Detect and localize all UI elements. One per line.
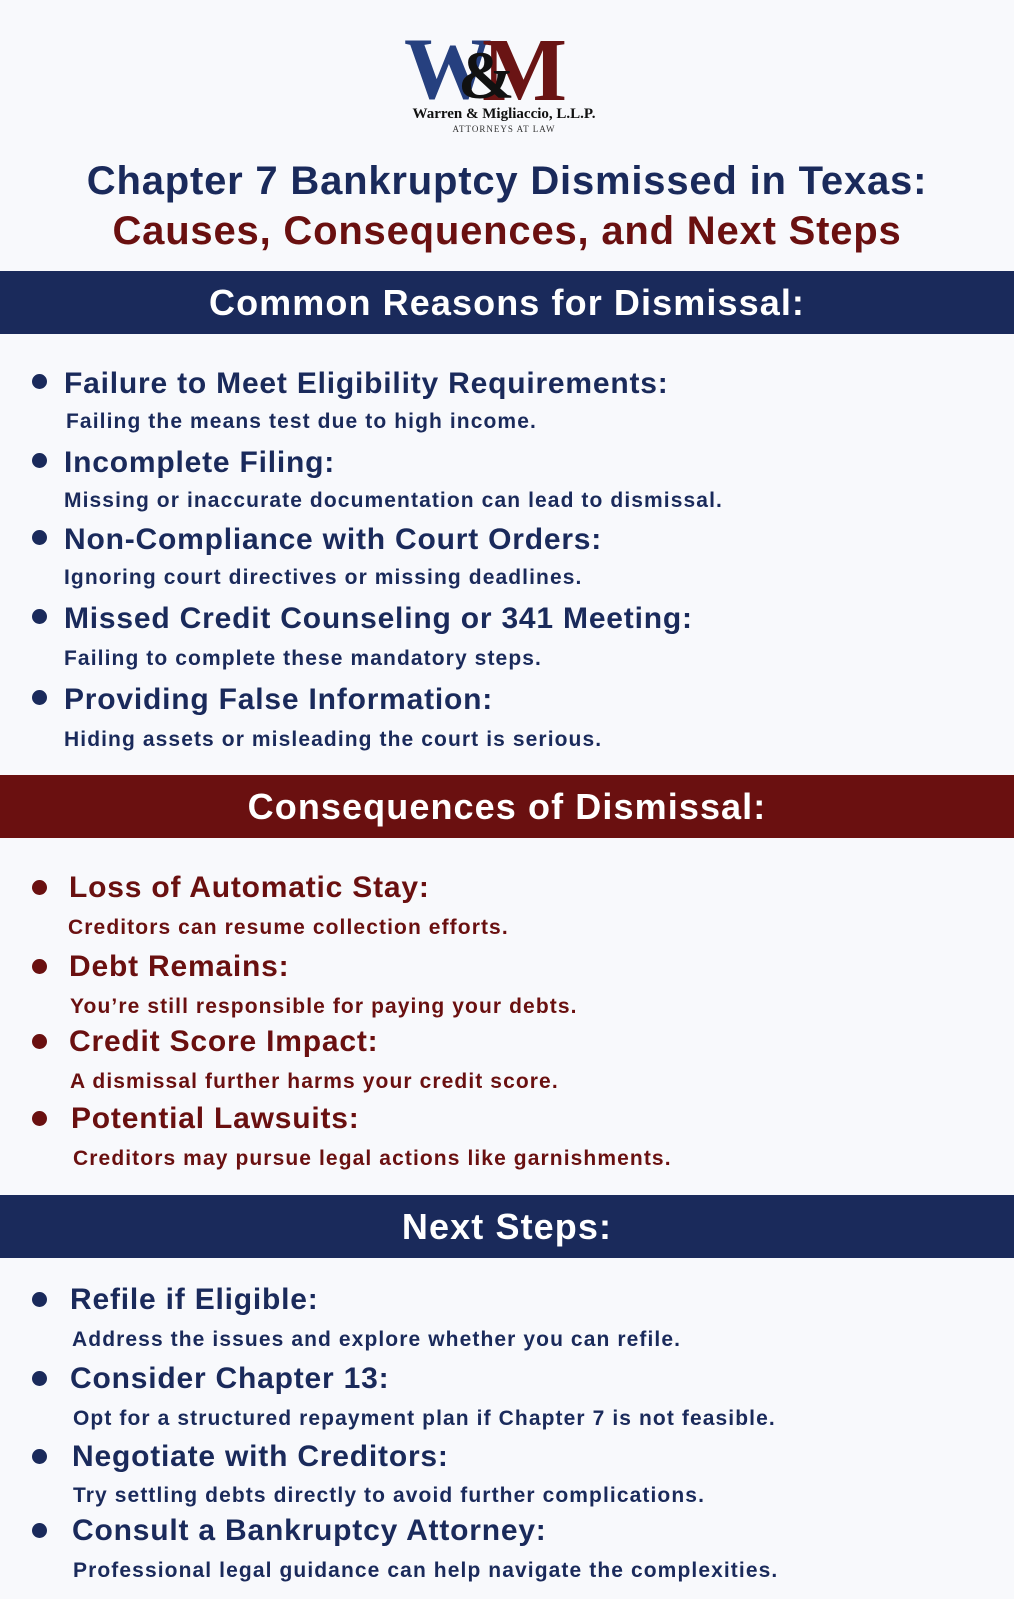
list: consequences: A dismissal further harms your credit score. [70, 1070, 559, 1093]
list: reasons: Failing to complete these mandatory steps. [64, 647, 542, 670]
list: reasons: Failing the means test due to high income. [66, 410, 537, 433]
list: consequences: Creditors can resume collection efforts. [68, 916, 509, 939]
section bar: reasons: Common Reasons for Dismissal: [209, 282, 805, 323]
list: next steps: Refile if Eligible: [70, 1283, 319, 1316]
list: reasons: Failure to Meet Eligibility Requirements: [64, 367, 669, 400]
list: next steps: Negotiate with Creditors: [72, 1440, 449, 1473]
list: consequences: Debt Remains: [69, 950, 289, 983]
logo: Warren & Migliaccio, L.L.P. [413, 106, 596, 122]
title: Chapter 7 Bankruptcy Dismissed in Texas: [87, 159, 927, 203]
list: reasons: Non-Compliance with Court Orders: [64, 523, 602, 556]
list: reasons: Hiding assets or misleading the court is serious. [64, 728, 602, 751]
list: reasons: Missed Credit Counseling or 341 Meeting: [64, 602, 693, 635]
section bar: consequences: Consequences of Dismissal: [248, 786, 766, 827]
list: reasons: Missing or inaccurate documentation can lead to dismissal. [64, 489, 723, 512]
list: consequences: Credit Score Impact: [69, 1025, 378, 1058]
logo [404, 21, 596, 134]
section bar: reasons [0, 271, 1014, 334]
section bar: next steps: Next Steps: [402, 1206, 612, 1247]
logo: & [458, 37, 515, 113]
list: next steps: Try settling debts directly to avoid further complications. [73, 1484, 705, 1507]
list: consequences: You’re still responsible for paying your debts. [70, 995, 578, 1018]
list: next steps: Professional legal guidance can help navigate the complexities. [73, 1559, 778, 1582]
list: consequences: Loss of Automatic Stay: [69, 871, 430, 904]
list: consequences: Potential Lawsuits: [71, 1102, 360, 1135]
list: reasons: Incomplete Filing: [64, 446, 335, 479]
section bar: consequences [0, 775, 1014, 838]
title [87, 159, 927, 253]
logo: ATTORNEYS AT LAW [453, 124, 555, 134]
list: consequences [32, 871, 672, 1170]
list: next steps: Consider Chapter 13: [70, 1362, 389, 1395]
list: next steps: Consult a Bankruptcy Attorney: [72, 1514, 547, 1547]
title: Causes, Consequences, and Next Steps [112, 209, 902, 253]
list: reasons: Providing False Information: [64, 683, 493, 716]
list: reasons: Ignoring court directives or missing deadlines. [64, 566, 582, 589]
list: next steps [32, 1283, 778, 1582]
list: reasons [32, 367, 723, 751]
list: next steps: Opt for a structured repayment plan if Chapter 7 is not feasible. [73, 1407, 776, 1430]
section bar: next steps [0, 1195, 1014, 1258]
list: next steps: Address the issues and explore whether you can refile. [72, 1328, 681, 1351]
list: consequences: Creditors may pursue legal actions like garnishments. [73, 1147, 672, 1170]
logo: M [482, 21, 567, 120]
logo: W [404, 21, 492, 118]
